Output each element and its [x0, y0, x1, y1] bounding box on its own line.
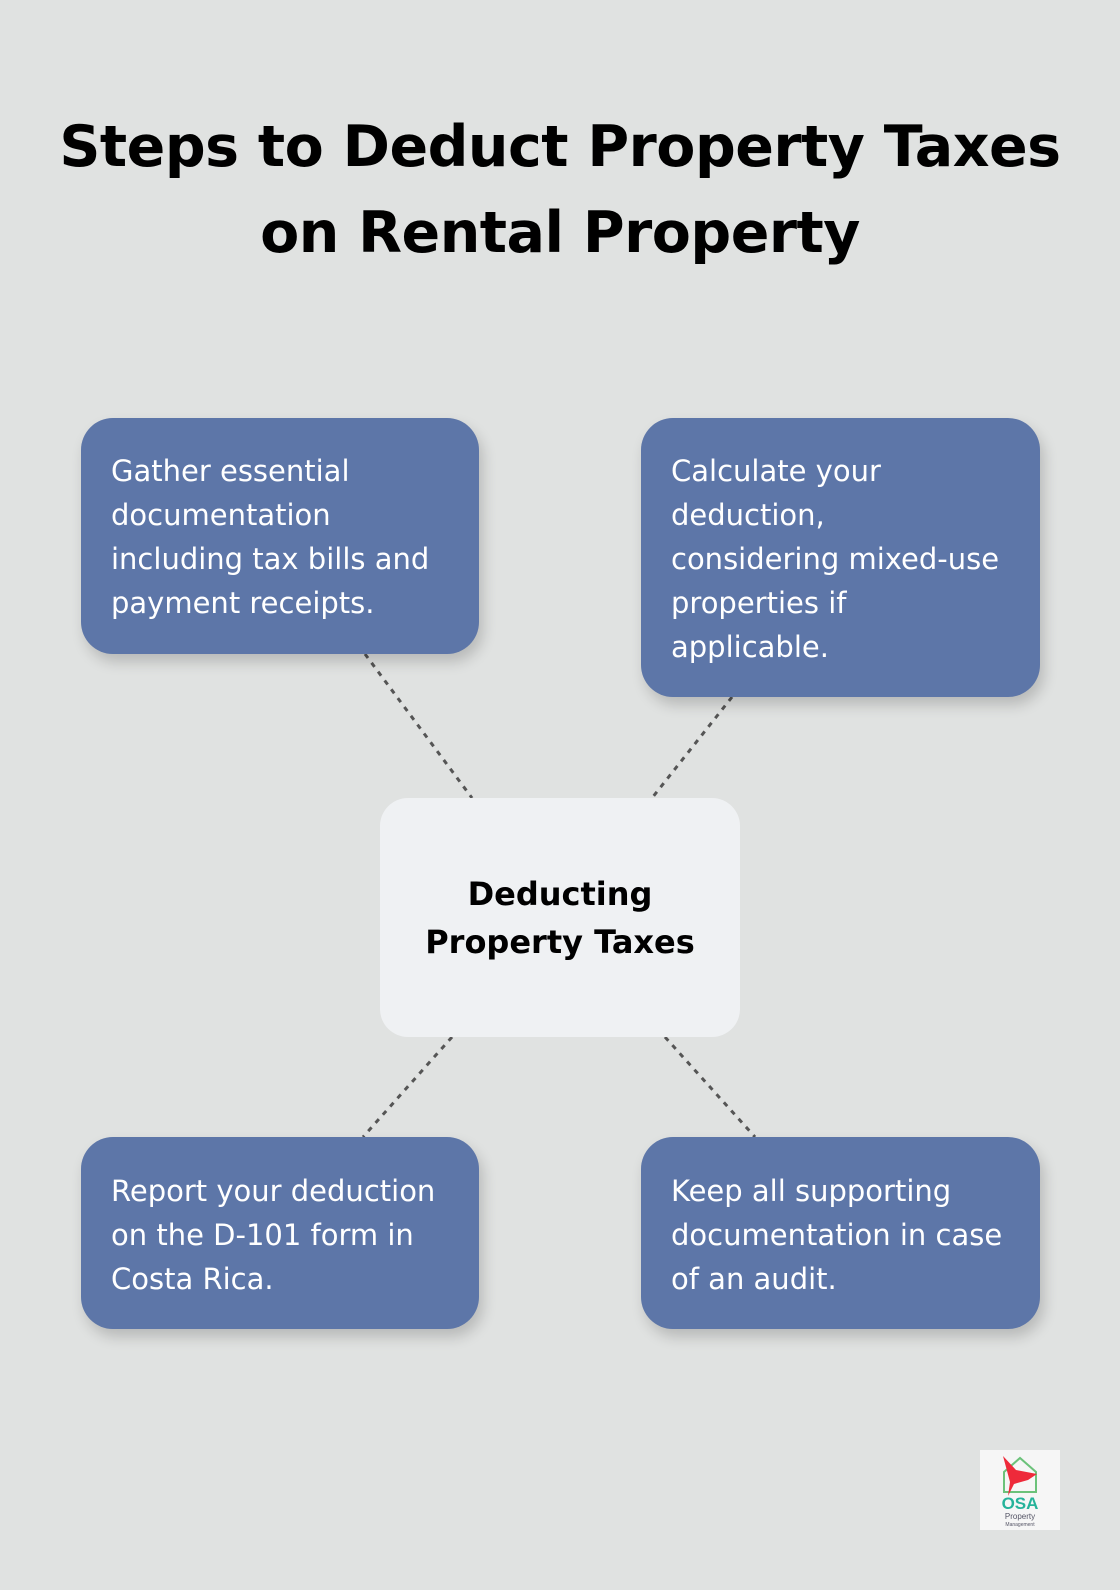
title: on Rental Property [260, 200, 860, 266]
box: report deduction: Costa Rica. [111, 1262, 274, 1296]
box: calculate deduction: deduction, [671, 498, 825, 532]
box: report deduction: on the D-101 form in [111, 1218, 414, 1252]
box: calculate deduction: Calculate your [671, 454, 881, 488]
box: keep documentation: documentation in case [671, 1218, 1002, 1252]
box: report deduction [81, 1137, 479, 1329]
logo: Property [1005, 1512, 1035, 1521]
box: calculate deduction: applicable. [671, 630, 829, 664]
logo: OSA [1002, 1494, 1038, 1513]
box: calculate deduction: considering mixed-use [671, 542, 999, 576]
box: report deduction: Report your deduction [111, 1174, 435, 1208]
box: calculate deduction [641, 418, 1040, 697]
title [59, 114, 1061, 266]
box: keep documentation: of an audit. [671, 1262, 837, 1296]
logo [980, 1450, 1060, 1530]
box: gather documentation: including tax bills and [111, 542, 429, 576]
title: Steps to Deduct Property Taxes [59, 114, 1061, 180]
center box: Deducting [468, 874, 652, 912]
box: keep documentation [641, 1137, 1040, 1329]
box: gather documentation: documentation [111, 498, 331, 532]
center box: Property Taxes [425, 922, 695, 960]
box: keep documentation: Keep all supporting [671, 1174, 951, 1208]
box: calculate deduction: properties if [671, 586, 846, 620]
logo: Management [1005, 1522, 1035, 1528]
box: gather documentation: Gather essential [111, 454, 350, 488]
box: gather documentation [81, 418, 479, 654]
box: gather documentation: payment receipts. [111, 586, 374, 620]
center box [380, 798, 740, 1037]
